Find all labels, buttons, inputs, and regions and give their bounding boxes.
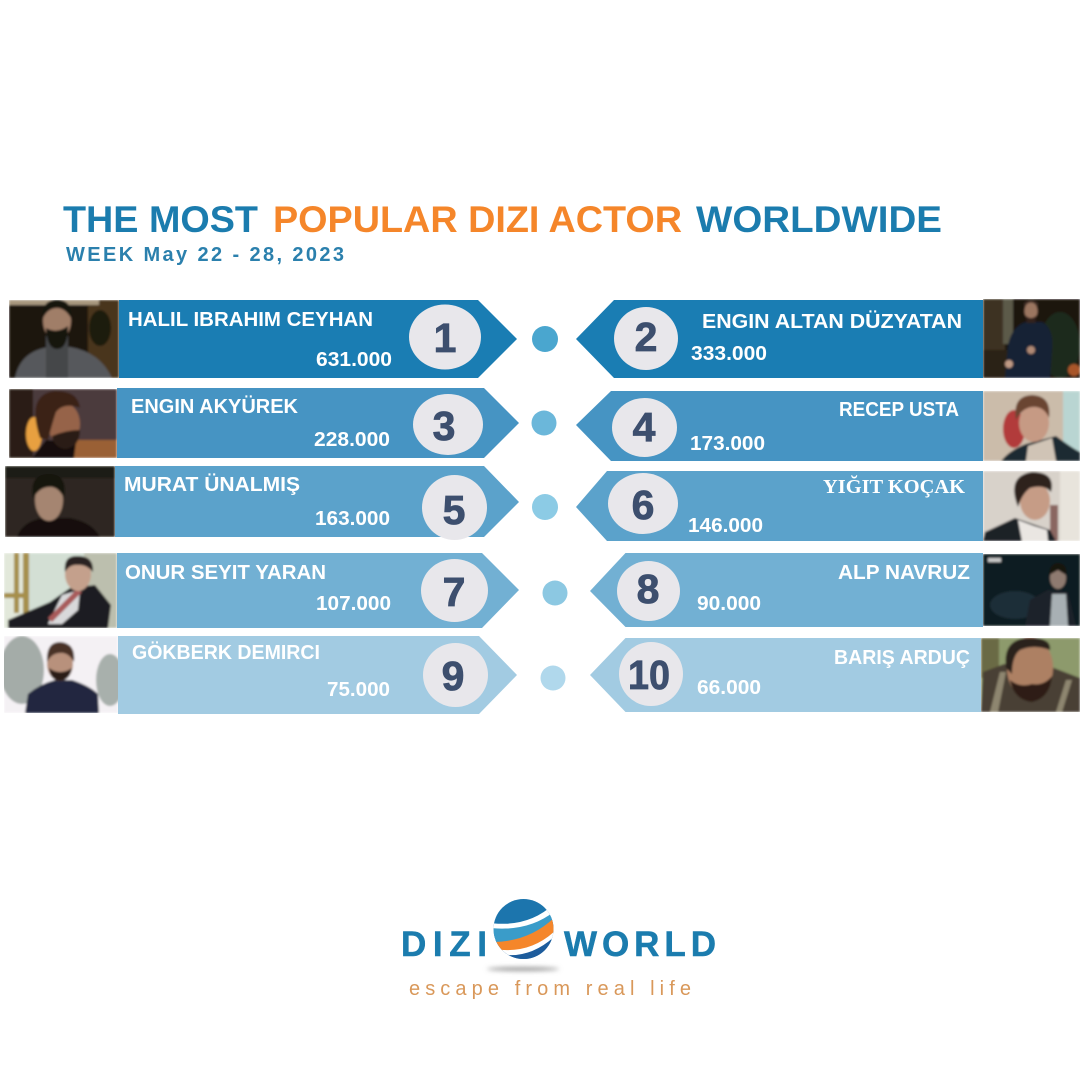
logo shadow xyxy=(487,967,559,971)
photo: Barış Arduç xyxy=(981,638,1080,712)
name: ENGIN ALTAN DÜZYATAN xyxy=(702,310,962,333)
logo: Dizi World xyxy=(401,895,716,1000)
value: 66.000 xyxy=(697,677,761,699)
rank badge: 7 xyxy=(443,569,465,615)
photo: Yiğit Koçak xyxy=(983,471,1080,541)
photo: Alp Navruz xyxy=(983,554,1080,626)
row: rank 7 xyxy=(4,553,519,628)
name: ALP NAVRUZ xyxy=(838,562,970,584)
value: 75.000 xyxy=(327,679,390,701)
rank badge: 10 xyxy=(628,652,670,698)
title xyxy=(63,199,942,240)
row: rank 9 xyxy=(0,636,517,714)
value: 333.000 xyxy=(691,343,767,365)
connector dot 1-2 xyxy=(532,326,558,352)
connector dot 3-4 xyxy=(532,410,556,436)
name: GÖKBERK DEMIRCI xyxy=(132,641,320,664)
rank badge xyxy=(409,304,481,370)
logo icon: globe xyxy=(494,899,554,959)
name: ONUR SEYIT YARAN xyxy=(125,562,326,584)
photo: Gökberk Demirci xyxy=(4,636,118,713)
rank badge xyxy=(617,561,680,621)
name: MURAT ÜNALMIŞ xyxy=(124,473,300,496)
photo: Engin Akyürek xyxy=(9,389,117,458)
rank badge: 9 xyxy=(442,653,464,699)
rank badge xyxy=(422,475,487,540)
tagline: escape from real life xyxy=(409,978,691,1000)
rank badge: 2 xyxy=(635,314,657,360)
rank badge: 1 xyxy=(434,315,456,361)
rank badge: 5 xyxy=(443,487,465,533)
value: 90.000 xyxy=(697,593,761,615)
name: RECEP USTA xyxy=(839,399,959,421)
row: rank 1 xyxy=(9,300,517,378)
name: BARIŞ ARDUÇ xyxy=(834,647,970,669)
row: rank 8 xyxy=(590,553,1080,627)
rank badge xyxy=(421,559,488,622)
title: THE MOST xyxy=(63,199,258,240)
row: rank 5 xyxy=(5,466,519,540)
rank badge xyxy=(608,473,678,534)
name: YIĞIT KOÇAK xyxy=(823,474,965,498)
row: rank 10 xyxy=(590,637,1080,712)
connector dot 9-10 xyxy=(540,666,566,690)
row: rank 6 xyxy=(576,471,1080,541)
rank badge: 3 xyxy=(433,403,455,449)
value: 173.000 xyxy=(690,433,765,455)
rank badge xyxy=(423,643,488,707)
row: rank 3 xyxy=(9,388,519,458)
value: 228.000 xyxy=(314,429,390,451)
rank badge xyxy=(413,394,483,455)
rank badge xyxy=(619,642,683,706)
photo: Murat Ünalmış xyxy=(5,466,115,537)
rank badge xyxy=(612,398,677,457)
row: rank 2 xyxy=(576,299,1080,378)
photo: Recep Usta xyxy=(983,391,1080,461)
title: WORLDWIDE xyxy=(696,199,942,240)
rank badge: 6 xyxy=(632,482,654,528)
title: POPULAR DIZI ACTOR xyxy=(273,199,682,240)
logo wordmark: DIZI: DIZI xyxy=(401,925,487,964)
value: 107.000 xyxy=(316,593,391,615)
rank badge xyxy=(614,307,678,370)
logo wordmark: WORLD: WORLD xyxy=(564,925,716,964)
value: 146.000 xyxy=(688,515,763,537)
name: ENGIN AKYÜREK xyxy=(131,395,299,418)
photo: Onur Seyit Yaran xyxy=(4,553,117,628)
rank badge: 4 xyxy=(633,404,656,450)
photo: Halil Ibrahim Ceyhan xyxy=(9,300,119,378)
rank badge: 8 xyxy=(637,566,659,612)
name: HALIL IBRAHIM CEYHAN xyxy=(128,309,373,331)
value: 163.000 xyxy=(315,508,390,530)
row: rank 4 xyxy=(576,391,1080,461)
subtitle: week: WEEK May 22 - 28, 2023 xyxy=(66,244,344,266)
connector dot 5-6 xyxy=(532,494,558,520)
connector dot 7-8 xyxy=(542,580,568,606)
photo: Engin Altan Düzyatan xyxy=(983,299,1080,378)
value: 631.000 xyxy=(316,349,392,371)
